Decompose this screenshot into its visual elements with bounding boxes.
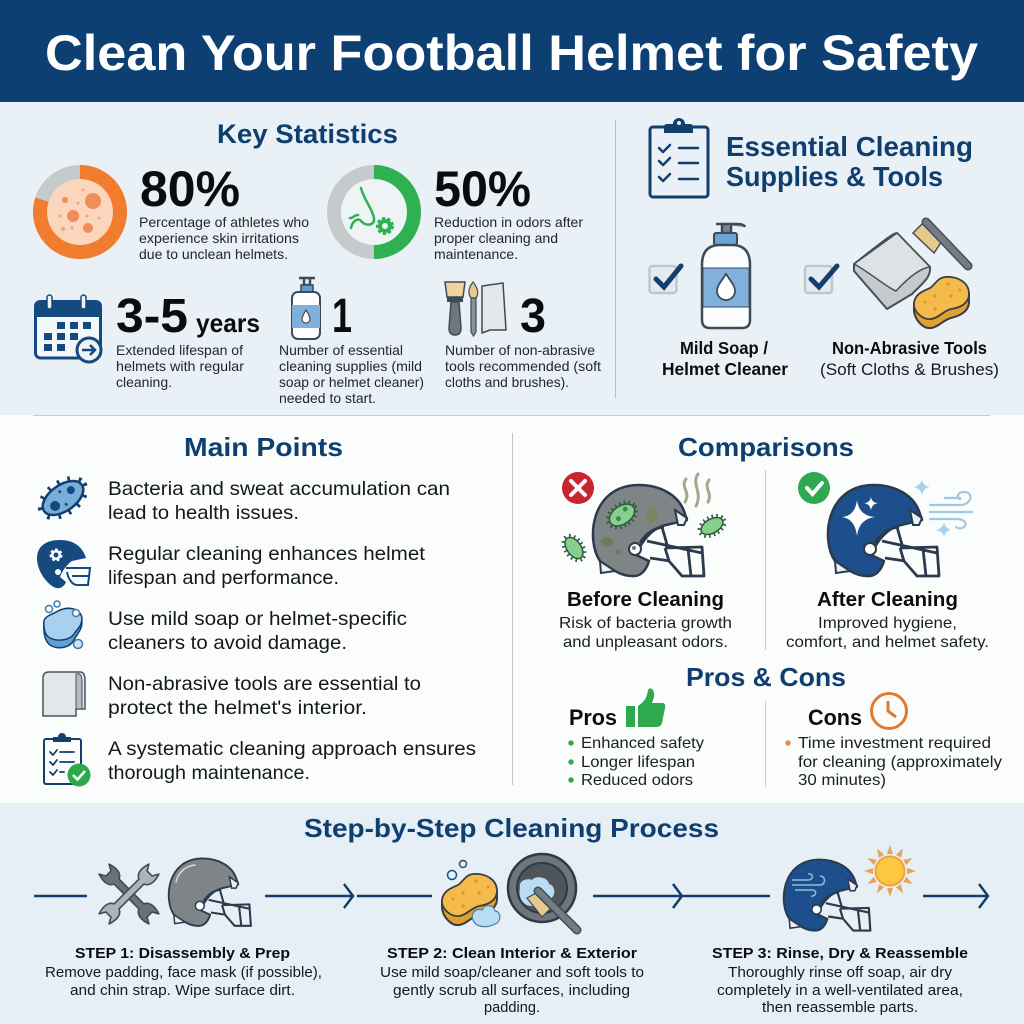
icon: cross badge	[562, 472, 594, 504]
point: bacteria: Bacteria and sweat accumulation can	[108, 478, 450, 500]
heading: key statistics: Key Statistics	[217, 119, 398, 149]
step 1	[45, 858, 322, 999]
list: pros: Longer lifespan	[581, 754, 695, 771]
step 1: and chin strap. Wipe surface dirt.	[70, 983, 295, 999]
point: bacteria: lead to health issues.	[108, 502, 299, 524]
step 2	[380, 854, 644, 1016]
comparison: before cleaning	[559, 472, 732, 651]
stat: 3-5 years lifespan: 3-5	[116, 290, 188, 343]
icon: dirty helmet	[593, 485, 704, 576]
icon: crossed wrenches	[98, 863, 160, 925]
icon: germ left	[560, 533, 588, 563]
stat: 80 percent skin irritations: 80%	[140, 161, 240, 217]
title banner: Clean Your Football Helmet for Safety	[45, 25, 978, 81]
heading: essential cleaning supplies and tools	[726, 131, 973, 192]
stat: 3-5 years lifespan: Extended lifespan of	[116, 342, 243, 358]
panel: cleaning process background	[0, 803, 1024, 1024]
stat: 3 non-abrasive tools: cloths and brushes).	[445, 374, 569, 390]
comparison: after cleaning: Improved hygiene,	[818, 615, 957, 632]
point: helmet lifespan: lifespan and performance.	[108, 567, 339, 589]
stat: 1 essential supply	[279, 278, 424, 406]
icon: clipboard with check	[44, 733, 90, 786]
icon: brushes and cloth	[445, 282, 506, 336]
stat: 3-5 years lifespan: cleaning.	[116, 374, 172, 390]
comparison: after cleaning	[786, 472, 989, 651]
step 3: Thoroughly rinse off soap, air dry	[728, 965, 953, 981]
supply: non-abrasive tools: (Soft Cloths & Brushes)	[820, 360, 999, 379]
icon: soapy sponge	[44, 601, 82, 648]
title banner	[0, 0, 1024, 102]
point: mild soap: Use mild soap or helmet-specific	[108, 608, 407, 630]
icon: nose donut	[327, 165, 421, 259]
step 2: Use mild soap/cleaner and soft tools to	[380, 965, 644, 981]
heading: step-by-step cleaning process: Step-by-Step Cleaning Process	[304, 813, 719, 843]
stat: 50 percent odor reduction: 50%	[434, 161, 531, 217]
supply: mild soap: Mild Soap /	[680, 338, 768, 358]
list: pros: Pros	[569, 705, 617, 730]
icon: thumbs up	[626, 688, 665, 727]
panel: key statistics and supplies background	[0, 102, 1024, 415]
icon: blue helmet with air	[784, 860, 870, 931]
list: pros: Reduced odors	[581, 772, 693, 789]
icon: sun	[864, 845, 916, 897]
panel: main points and comparisons background	[0, 415, 1024, 803]
list: pros	[568, 688, 704, 789]
stat: 1 essential supply: 1	[332, 290, 352, 343]
heading: essential cleaning supplies and tools: Supplies & Tools	[726, 161, 943, 192]
supply: mild soap: Helmet Cleaner	[662, 359, 788, 379]
icon: bacterium	[35, 473, 91, 523]
stat: 80 percent skin irritations: Percentage of athletes who	[139, 214, 309, 230]
list: cons	[785, 694, 1002, 789]
stat: 80 percent skin irritations: due to unclean helmets.	[139, 246, 288, 262]
point: systematic approach: thorough maintenance.	[108, 762, 310, 784]
list: cons: 30 minutes)	[798, 772, 886, 789]
comparison: before cleaning: Before Cleaning	[567, 589, 724, 611]
step 3	[712, 845, 968, 1016]
stat: 3-5 years lifespan	[34, 290, 260, 390]
stat: 3 non-abrasive tools	[445, 282, 601, 390]
stat: 1 essential supply: soap or helmet cleaner)	[279, 374, 424, 390]
step 2: STEP 2: Clean Interior & Exterior	[387, 945, 637, 962]
icon: supplies clipboard	[650, 118, 708, 197]
comparison: before cleaning: and unpleasant odors.	[563, 634, 728, 651]
point: mild soap	[44, 601, 407, 654]
supply: non-abrasive tools: Non-Abrasive Tools	[832, 338, 987, 358]
icon: odor waves	[684, 474, 709, 506]
step 2: padding.	[484, 1000, 540, 1016]
stat: 50 percent odor reduction	[327, 161, 583, 262]
step 3: STEP 3: Rinse, Dry & Reassemble	[712, 945, 968, 962]
icon: sponge and bubbles	[442, 860, 500, 927]
icon: gray helmet	[169, 858, 251, 926]
icon: skin irritation donut	[33, 165, 127, 259]
point: non-abrasive tools: protect the helmet's interior.	[108, 697, 367, 719]
stat: 1 essential supply: Number of essential	[279, 342, 403, 358]
list: cons: for cleaning (approximately	[798, 754, 1002, 771]
list: cons: Time investment required	[798, 735, 991, 752]
point: helmet lifespan: Regular cleaning enhances helmet	[108, 543, 426, 565]
icon: germ right	[697, 513, 727, 539]
point: non-abrasive tools	[43, 672, 421, 719]
point: helmet lifespan	[37, 540, 426, 589]
icon: sponge	[914, 277, 969, 328]
comparison: after cleaning: comfort, and helmet safety.	[786, 634, 989, 651]
icon: clean helmet	[828, 485, 939, 576]
step 1: STEP 1: Disassembly & Prep	[75, 945, 290, 962]
icon: calendar with arrow	[34, 295, 102, 362]
list: pros: Enhanced safety	[581, 735, 704, 752]
stat: 1 essential supply: cleaning supplies (mild	[279, 358, 422, 374]
step 3: completely in a well-ventilated area,	[717, 983, 963, 999]
heading: pros and cons: Pros & Cons	[686, 662, 846, 692]
icon: brush	[913, 222, 968, 266]
supply: mild soap	[650, 224, 788, 379]
point: systematic approach	[44, 733, 476, 786]
stat: 50 percent odor reduction: proper cleaning and	[434, 230, 558, 246]
process arrows	[34, 884, 988, 908]
point: non-abrasive tools: Non-abrasive tools are essential to	[108, 673, 421, 695]
stat: 3-5 years lifespan: years	[196, 308, 260, 338]
stat: 80 percent skin irritations	[33, 161, 309, 262]
icon: soap bottle small	[292, 278, 320, 339]
comparison: after cleaning: After Cleaning	[817, 589, 958, 611]
icon: folded towel	[43, 672, 85, 716]
heading: comparisons: Comparisons	[678, 432, 854, 462]
comparison: before cleaning: Risk of bacteria growth	[559, 615, 732, 632]
stat: 3 non-abrasive tools: Number of non-abrasive	[445, 342, 595, 358]
stat: 3-5 years lifespan: helmets with regular	[116, 358, 244, 374]
step 2: gently scrub all surfaces, including	[393, 983, 630, 999]
point: bacteria	[35, 473, 450, 524]
icon: clock	[872, 694, 906, 728]
icon: cloth	[854, 233, 930, 309]
point: mild soap: cleaners to avoid damage.	[108, 632, 347, 654]
stat: 50 percent odor reduction: Reduction in odors after	[434, 214, 583, 230]
icon: air and sparkles	[913, 479, 972, 537]
heading: essential cleaning supplies and tools: Essential Cleaning	[726, 131, 973, 162]
stat: 80 percent skin irritations: experience skin irritations	[139, 230, 299, 246]
stat: 1 essential supply: needed to start.	[279, 390, 376, 406]
stat: 3 non-abrasive tools: 3	[520, 290, 546, 343]
stat: 50 percent odor reduction: maintenance.	[434, 246, 518, 262]
icon: helmet with gear	[37, 540, 90, 588]
point: systematic approach: A systematic cleaning approach ensures	[108, 738, 476, 760]
list: cons: Cons	[808, 705, 862, 730]
stat: 3 non-abrasive tools: tools recommended (soft	[445, 358, 601, 374]
icon: check badge	[798, 472, 830, 504]
icon: soap bottle large	[702, 224, 750, 328]
heading: main points: Main Points	[184, 432, 343, 462]
step 1: Remove padding, face mask (if possible),	[45, 965, 322, 981]
icon: checkbox tools	[805, 266, 837, 293]
icon: helmet interior with brush	[508, 854, 577, 930]
supply: non-abrasive tools	[805, 222, 999, 379]
icon: checkbox soap	[650, 266, 681, 293]
step 3: then reassemble parts.	[762, 1000, 918, 1016]
